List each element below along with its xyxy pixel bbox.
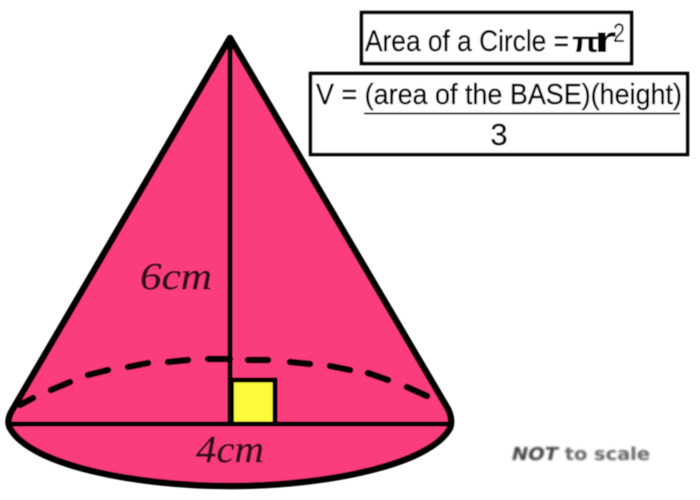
base diameter line xyxy=(10,422,451,426)
formula: area of a circle: Area of a Circle = xyxy=(365,25,569,58)
formula: volume of a cone xyxy=(310,74,688,154)
formula: volume of a cone: 3 xyxy=(490,117,508,152)
cone diagram xyxy=(9,38,451,486)
formula: area of a circle: r xyxy=(594,19,617,60)
base back edge (dashed) xyxy=(20,359,427,405)
note: not to scale: NOT to scale xyxy=(512,444,650,465)
right angle marker xyxy=(232,380,275,424)
formula: volume of a cone: V = (area of the BASE)(height) xyxy=(316,79,682,111)
diameter label: 4cm xyxy=(196,429,264,471)
formula: area of a circle: π xyxy=(572,24,599,58)
formula: area of a circle: 2 xyxy=(613,19,625,49)
formula: area of a circle xyxy=(362,12,632,64)
height label: 6cm xyxy=(140,256,212,298)
height line xyxy=(228,40,232,424)
cone body xyxy=(9,38,451,486)
